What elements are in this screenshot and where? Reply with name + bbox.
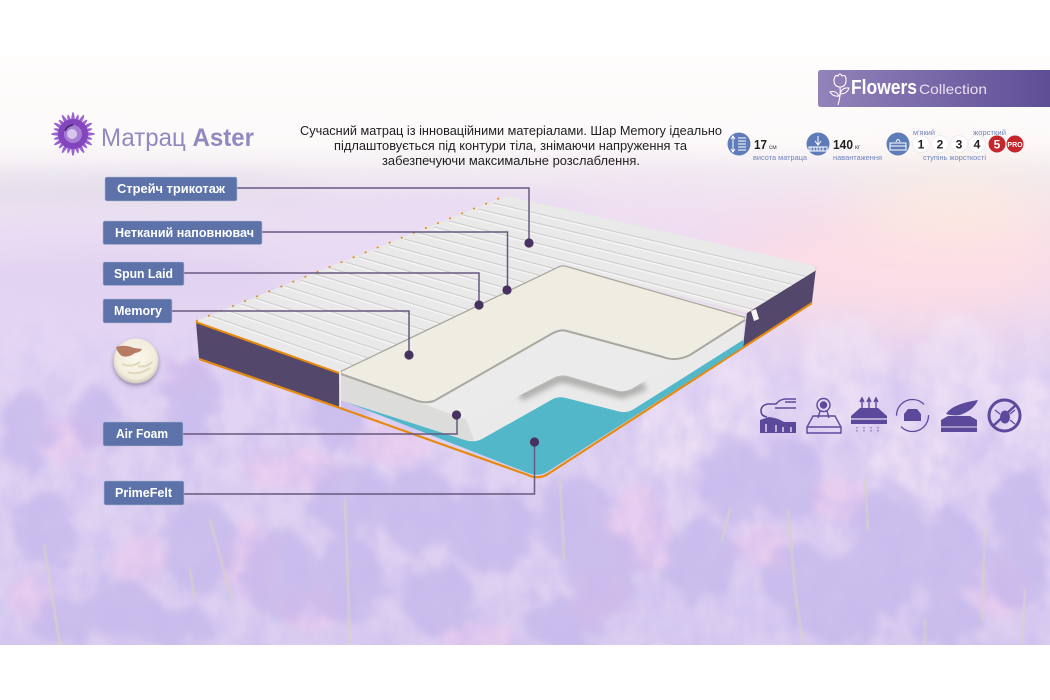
description text bbox=[300, 123, 722, 168]
label: Air Foam: Air Foam bbox=[116, 427, 168, 441]
stat: load 140 kg: 140 bbox=[833, 138, 853, 152]
Air Foam top surface bbox=[340, 265, 745, 419]
stat: firmness scale: 1 bbox=[918, 138, 925, 152]
layer: Stretch knit quilted top bbox=[196, 196, 816, 372]
stat: mattress height 17 cm bbox=[728, 132, 808, 162]
stat: mattress height 17 cm: см bbox=[769, 144, 777, 151]
label: Нетканий наповнювач bbox=[103, 221, 262, 244]
label: PrimeFelt bbox=[104, 481, 184, 505]
banner: Flowers Collection bbox=[818, 70, 1050, 107]
label: PrimeFelt: PrimeFelt bbox=[115, 486, 173, 500]
stat: load 140 kg: кг bbox=[855, 144, 861, 151]
stat: mattress height 17 cm: висота матраца bbox=[753, 153, 808, 162]
icon: tulip bbox=[830, 74, 849, 105]
title: Матрац Aster bbox=[101, 124, 254, 152]
label: Spun Laid: Spun Laid bbox=[114, 267, 173, 281]
layer: Spun Laid edge bbox=[341, 266, 745, 372]
stat: firmness scale: м'який bbox=[913, 129, 935, 137]
orange piping bbox=[196, 268, 816, 477]
banner: Flowers Collection: Collection bbox=[919, 81, 987, 97]
stat: firmness scale: 5 bbox=[994, 138, 1001, 152]
stat: load 140 kg bbox=[806, 132, 882, 162]
icon: soft feather mattress bbox=[941, 400, 978, 432]
stat: firmness scale: 3 bbox=[956, 138, 963, 152]
edge strip at cut bbox=[339, 372, 341, 407]
side fabric: left bbox=[196, 322, 340, 407]
callout lines and dots bbox=[172, 188, 539, 494]
label: Стрейч трикотаж: Стрейч трикотаж bbox=[117, 182, 225, 196]
side fabric: right bbox=[743, 268, 816, 347]
layer: PrimeFelt blue base bbox=[341, 300, 743, 475]
label: Memory: Memory bbox=[114, 304, 162, 318]
banner: Flowers Collection: Flowers bbox=[851, 77, 917, 99]
label: Нетканий наповнювач: Нетканий наповнювач bbox=[115, 226, 254, 240]
label: Spun Laid bbox=[103, 262, 184, 286]
Air Foam front face bbox=[340, 373, 474, 440]
label: Memory bbox=[103, 299, 172, 323]
description text: підлаштовується під контури тіла, знімаючи напруження та bbox=[334, 138, 688, 153]
stat: firmness scale: 2 bbox=[937, 138, 944, 152]
layer: Air Foam bbox=[340, 265, 745, 441]
stat: firmness scale bbox=[886, 129, 1024, 162]
icon: aster flower bbox=[51, 112, 95, 156]
description text: забезпечуючи максимальне розслаблення. bbox=[382, 153, 640, 168]
mattress tag bbox=[751, 309, 759, 321]
icon: memory foam ball with hand bbox=[114, 338, 158, 384]
label: Air Foam bbox=[103, 422, 183, 446]
stat: load 140 kg: навантаження bbox=[833, 153, 882, 162]
stat: firmness scale: жорсткий bbox=[973, 129, 1006, 137]
icon: quality mattress bbox=[807, 398, 841, 433]
icon: rotating mattress bbox=[896, 400, 928, 432]
icon: anti-mite bbox=[989, 400, 1020, 431]
stat: firmness scale: 4 bbox=[974, 138, 981, 152]
mattress illustration bbox=[196, 196, 816, 478]
label: Стрейч трикотаж bbox=[105, 177, 237, 201]
layer: Memory foam bbox=[341, 266, 745, 400]
background: lavender field bbox=[0, 138, 1050, 645]
stat: firmness scale: ступінь жорсткості bbox=[923, 153, 986, 162]
Air Foam inner wall shading bbox=[520, 378, 645, 397]
Memory shadow edge bbox=[341, 320, 745, 402]
icon: orthopedic support bbox=[760, 399, 796, 433]
icon: breathable mattress bbox=[851, 398, 887, 433]
description text: Сучасний матрац із інноваційними матеріалами. Шар Memory ідеально bbox=[300, 123, 722, 138]
stat: mattress height 17 cm: 17 bbox=[754, 138, 767, 152]
stat: firmness scale: PRO bbox=[1007, 142, 1023, 149]
